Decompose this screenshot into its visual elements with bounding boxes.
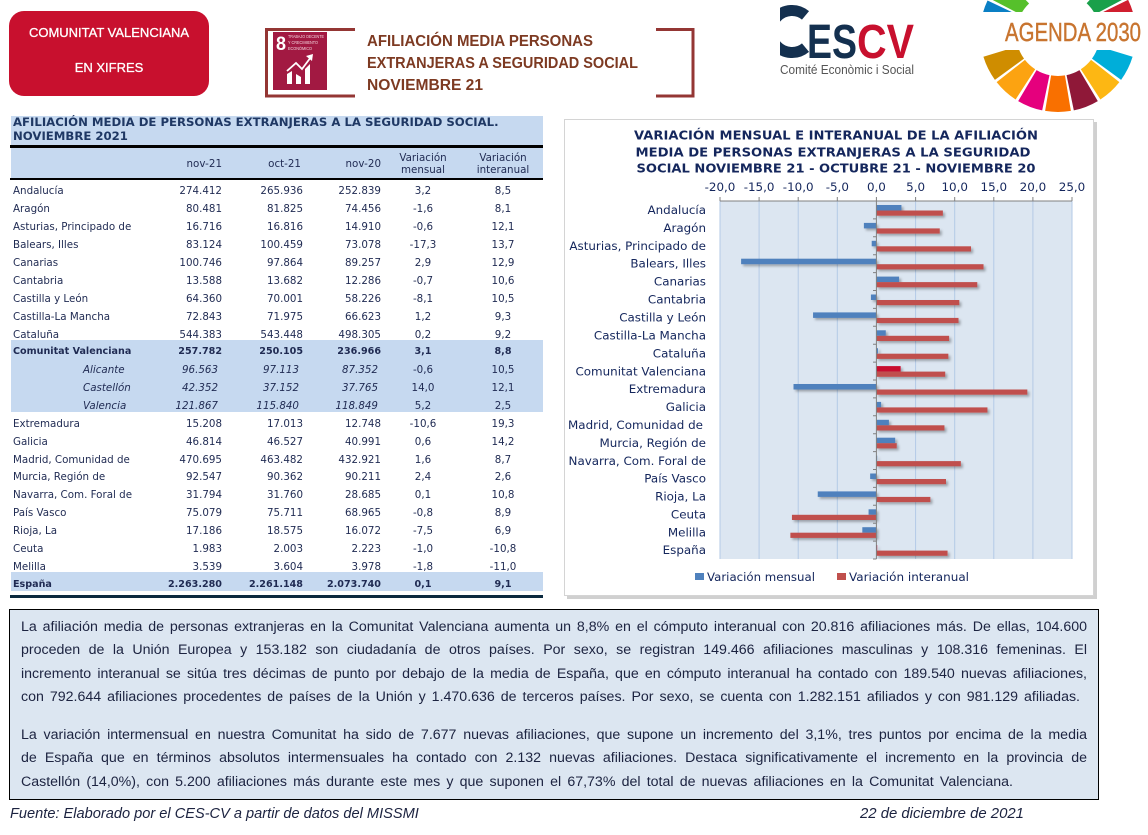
row: Cantabria — [13, 275, 514, 287]
row: Andalucía: 265.936 — [260, 185, 303, 197]
row: Galicia: Galicia — [13, 436, 48, 448]
logo: Agenda 2030 wheel — [983, 0, 1141, 112]
row: Extremadura: 17.013 — [267, 418, 303, 430]
row: Extremadura: Extremadura — [13, 418, 80, 430]
y axis labels: Navarra, Com. Foral de — [569, 454, 706, 468]
paragraph: interannual — [21, 619, 1087, 705]
table title: NOVIEMBRE 2021 — [13, 129, 128, 143]
row: Rioja — [13, 525, 511, 537]
row: Rioja: 6,9 — [495, 525, 511, 537]
row: Rioja: 16.072 — [345, 525, 381, 537]
row: País Vasco — [13, 507, 511, 519]
row: Melilla: -1,8 — [413, 561, 433, 573]
row: Comunitat Valenciana: 236.966 — [337, 346, 381, 357]
badge: Comunitat Valenciana en xifres — [9, 11, 209, 96]
table header row — [187, 152, 529, 176]
row: Comunitat Valenciana: 8,8 — [494, 346, 512, 357]
table header row: nov-21 — [187, 158, 222, 170]
row: Asturias: 16.716 — [186, 221, 222, 233]
row: Balears: 83.124 — [186, 239, 222, 251]
panel: bar chart — [564, 119, 1097, 599]
y axis labels: Aragón — [663, 221, 706, 235]
row: Rioja: 18.575 — [267, 525, 303, 537]
legend: Variación interanual — [849, 570, 969, 584]
row: Melilla: 3.604 — [274, 561, 303, 573]
date: 22 de diciembre de 2021 — [860, 806, 1024, 822]
x axis labels — [705, 180, 1085, 194]
row: Castilla y León: -8,1 — [413, 293, 433, 305]
row: Cantabria: Cantabria — [13, 275, 63, 287]
paragraph: interannual: proceden de la Unión Europea y 153.182 son ciudadanía de otros países. Por sexo, se registran 149.466 afiliaciones masculinas y 108.316 femeninas. El — [21, 642, 1087, 658]
row: Castellón — [83, 382, 514, 394]
row: Navarra: Navarra, Com. Foral de — [13, 489, 132, 501]
y axis labels: Castilla y León — [619, 310, 706, 324]
row: Cataluña: 544.383 — [179, 329, 222, 341]
row: Asturias: -0,6 — [413, 221, 433, 233]
row: Galicia: 46.527 — [267, 436, 303, 448]
row: Extremadura: 19,3 — [492, 418, 514, 430]
row: Castilla y León: 10,5 — [492, 293, 514, 305]
row: Ceuta: 2.223 — [352, 543, 381, 555]
x axis labels: -15,0 — [744, 180, 774, 194]
y axis labels: Ceuta — [671, 508, 706, 522]
row: Murcia: 92.547 — [186, 471, 222, 483]
y axis labels: Galicia — [666, 400, 706, 414]
bracket: right — [656, 30, 693, 96]
paragraph: intermonthly: La variación intermensual en nuestra Comunitat ha sido de 7.677 nuevas afiliaciones, que supone un incremento del 3,1%, tres puntos por encima de la media — [21, 727, 1087, 743]
row: Madrid: 1,6 — [415, 454, 431, 466]
icon: SDG 8 decent work — [273, 32, 327, 90]
row: España: España — [13, 579, 52, 590]
row: Andalucía: 8,5 — [495, 185, 511, 197]
table header row: mensual — [401, 164, 445, 176]
x axis labels: 0,0 — [867, 180, 886, 194]
row: Castilla y León: 64.360 — [186, 293, 222, 305]
row: España: 0,1 — [414, 579, 432, 590]
row: Navarra — [13, 489, 514, 501]
x axis labels: 10,0 — [941, 180, 968, 194]
legend — [695, 570, 969, 584]
row: Aragón: 74.456 — [345, 203, 381, 215]
y axis labels: Cataluña — [653, 346, 706, 360]
y axis labels: Comunitat Valenciana — [575, 364, 706, 378]
row: España: 9,1 — [494, 579, 512, 590]
row: Aragón: -1,6 — [413, 203, 433, 215]
row: País Vasco: -0,8 — [413, 507, 433, 519]
row: Valencia — [83, 400, 511, 412]
table header row: Variación — [479, 152, 527, 164]
row: Cantabria: 13.588 — [186, 275, 222, 287]
icon: SDG 8 decent work: TRABAJO DECENTE — [288, 34, 324, 39]
heading: report title: AFILIACIÓN MEDIA PERSONAS — [367, 32, 593, 50]
row: Balears: 13,7 — [492, 239, 514, 251]
row: Murcia: 90.362 — [267, 471, 303, 483]
row: Murcia: 2,4 — [415, 471, 431, 483]
row: Valencia: Valencia — [83, 400, 126, 412]
row: Castilla-La Mancha: 9,3 — [495, 311, 511, 323]
table header row: interanual — [477, 164, 529, 176]
paragraph: intermonthly: de España que en términos absolutos intermensuales ha contado con 2.132 nuevas afiliaciones. Destaca significativamente el incremento en la provincia de — [21, 750, 1087, 766]
row: Galicia: 0,6 — [415, 436, 431, 448]
badge: Comunitat Valenciana en xifres: EN XIFRES — [75, 60, 143, 75]
x axis labels: -5,0 — [826, 180, 849, 194]
row: Madrid — [13, 454, 511, 466]
y axis labels: Madrid, Comunidad de — [568, 418, 703, 432]
paragraph: interannual: La afiliación media de personas extranjeras en la Comunitat Valenciana aumenta un 8,8% en el cómputo interanual con 20.816 afiliaciones más. De ellas, 104.600 — [21, 619, 1087, 635]
row: Andalucía: 252.839 — [338, 185, 381, 197]
row: Aragón: Aragón — [13, 203, 50, 215]
chart title: MEDIA DE PERSONAS EXTRANJERAS A LA SEGURIDAD — [636, 144, 1030, 160]
plot area — [720, 201, 1072, 559]
y axis labels: Melilla — [668, 526, 706, 540]
row: Alicante: 97.113 — [263, 364, 299, 376]
row: Cantabria: 10,6 — [492, 275, 514, 287]
row: Comunitat Valenciana: Comunitat Valenciana — [13, 346, 131, 357]
row: Murcia: Murcia, Región de — [13, 471, 105, 483]
chart title: VARIACIÓN MENSUAL E INTERANUAL DE LA AFILIACIÓN — [634, 128, 1038, 142]
row: Alicante: 10,5 — [492, 364, 514, 376]
row: País Vasco: 8,9 — [495, 507, 511, 519]
row: País Vasco: 68.965 — [345, 507, 381, 519]
row: Ceuta: -10,8 — [490, 543, 516, 555]
icon: SDG 8 decent work: Y CRECIMIENTO — [288, 40, 319, 45]
row: Balears: 73.078 — [345, 239, 381, 251]
row: Canarias: 12,9 — [492, 257, 514, 269]
row: Cataluña: 0,2 — [415, 329, 431, 341]
row: Andalucía: Andalucía — [13, 185, 64, 197]
x axis labels: 20,0 — [1020, 180, 1046, 194]
row: Ceuta: Ceuta — [13, 543, 43, 555]
row: Castilla-La Mancha: Castilla-La Mancha — [13, 311, 110, 323]
row: Ceuta: 2.003 — [274, 543, 303, 555]
logo: CES-CV — [780, 5, 914, 77]
y axis labels: Balears, Illes — [630, 256, 706, 270]
row: Galicia: 46.814 — [186, 436, 222, 448]
row: Balears: Balears, Illes — [13, 239, 78, 251]
row: Canarias — [13, 257, 514, 269]
row: Extremadura: 12.748 — [345, 418, 381, 430]
row: Murcia: 2,6 — [495, 471, 511, 483]
row: Canarias: Canarias — [13, 257, 58, 269]
row: España — [13, 579, 512, 590]
row: Castilla y León: Castilla y León — [13, 293, 88, 305]
row: Melilla: 3.978 — [352, 561, 381, 573]
row: Melilla: 3.539 — [193, 561, 222, 573]
table header row: Variación — [399, 152, 447, 164]
bracket: left — [266, 30, 355, 96]
icon: SDG 8 decent work: 8 — [276, 34, 286, 55]
row: Navarra: 0,1 — [415, 489, 431, 501]
source note: Fuente: Elaborado por el CES-CV a partir de datos del MISSMI — [10, 806, 419, 822]
series: variación mensual bars — [741, 205, 901, 551]
row: Asturias — [13, 221, 514, 233]
row: Alicante: 96.563 — [182, 364, 218, 376]
row: Castellón: 14,0 — [412, 382, 434, 394]
row: Rioja: 17.186 — [186, 525, 222, 537]
row: Aragón: 8,1 — [495, 203, 511, 215]
row: Castilla y León — [13, 293, 514, 305]
row: País Vasco: 75.079 — [186, 507, 222, 519]
row: Castilla-La Mancha — [13, 311, 511, 323]
row: Canarias: 100.746 — [179, 257, 222, 269]
heading: report title — [367, 32, 638, 94]
table title: AFILIACIÓN MEDIA DE PERSONAS EXTRANJERAS A LA SEGURIDAD SOCIAL. — [13, 115, 499, 129]
panel: data table — [10, 115, 543, 598]
row: Cantabria: 12.286 — [345, 275, 381, 287]
header heading with SDG icon and brackets — [265, 28, 694, 98]
legend: Variación mensual — [707, 570, 815, 584]
row: País Vasco: País Vasco — [13, 507, 66, 519]
row: Madrid: 8,7 — [495, 454, 511, 466]
row: Castilla y León: 70.001 — [267, 293, 303, 305]
x axis labels: 25,0 — [1059, 180, 1085, 194]
row: España: 2.263.280 — [168, 579, 222, 590]
row: Murcia: 90.211 — [345, 471, 381, 483]
row: Valencia: 2,5 — [495, 400, 511, 412]
row: Murcia — [13, 471, 511, 483]
row: Castellón: 37.152 — [263, 382, 299, 394]
logo: CES-CV: ES — [807, 16, 857, 69]
y axis labels: Cantabria — [648, 292, 706, 306]
row: Navarra: 28.685 — [345, 489, 381, 501]
series: variación interanual bars — [790, 210, 1027, 556]
row: Alicante: -0,6 — [413, 364, 433, 376]
row: Andalucía — [13, 185, 511, 197]
row: Rioja: -7,5 — [413, 525, 433, 537]
row: Cataluña: 543.448 — [260, 329, 303, 341]
row: Galicia: 40.991 — [345, 436, 381, 448]
row: Cataluña: 9,2 — [495, 329, 511, 341]
row: Aragón: 81.825 — [267, 203, 303, 215]
row: Castilla y León: 58.226 — [345, 293, 381, 305]
row: España: 2.073.740 — [327, 579, 381, 590]
paragraph: intermonthly: Castellón (14,0%), con 5.200 afiliaciones más durante este mes y que suponen el 67,73% del total de nuevas afiliaciones en la Comunitat Valenciana. — [21, 774, 1013, 790]
row: Alicante: 87.352 — [342, 364, 378, 376]
row: Ceuta: -1,0 — [413, 543, 433, 555]
row: Asturias: Asturias, Principado de — [13, 221, 131, 233]
row: Melilla: -11,0 — [490, 561, 516, 573]
row: Balears: -17,3 — [410, 239, 436, 251]
y axis labels: Asturias, Principado de — [569, 239, 706, 253]
row: Madrid: 470.695 — [179, 454, 222, 466]
vertical zero axis — [873, 201, 876, 559]
row: Balears: 100.459 — [260, 239, 303, 251]
row: Madrid: 432.921 — [338, 454, 381, 466]
x axis labels: 15,0 — [981, 180, 1007, 194]
row: Canarias: 89.257 — [345, 257, 381, 269]
row: Cataluña — [13, 329, 511, 341]
row: Asturias: 16.816 — [267, 221, 303, 233]
row: Balears — [13, 239, 514, 251]
row: Comunitat Valenciana — [13, 346, 512, 357]
row: Castellón: 37.765 — [342, 382, 378, 394]
icon: SDG 8 decent work: ECONÓMICO — [288, 46, 313, 51]
chart title — [634, 128, 1038, 176]
row: Galicia — [13, 436, 514, 448]
y axis labels: España — [663, 543, 706, 557]
row: España: 2.261.148 — [249, 579, 303, 590]
x axis labels: -20,0 — [705, 180, 735, 194]
y axis labels: País Vasco — [644, 472, 706, 486]
table header row: oct-21 — [268, 158, 301, 170]
table title — [13, 115, 499, 143]
paragraph: intermonthly — [21, 727, 1087, 790]
row: Castilla-La Mancha: 71.975 — [267, 311, 303, 323]
chart title: SOCIAL NOVIEMBRE 21 - OCTUBRE 21 - NOVIEMBRE 20 — [636, 160, 1036, 176]
row: Madrid: 463.482 — [260, 454, 303, 466]
row: Castellón: 12,1 — [492, 382, 514, 394]
logo: CES-CV: Comité Econòmic i Social — [780, 63, 914, 77]
row: Navarra: 10,8 — [492, 489, 514, 501]
row: Madrid: Madrid, Comunidad de — [13, 454, 130, 466]
row: Aragón: 80.481 — [186, 203, 222, 215]
row: Valencia: 5,2 — [415, 400, 431, 412]
row: Valencia: 115.840 — [256, 400, 299, 412]
row: Galicia: 14,2 — [492, 436, 514, 448]
row: Castilla-La Mancha: 1,2 — [415, 311, 431, 323]
x axis labels: 5,0 — [906, 180, 925, 194]
row: Cataluña: 498.305 — [338, 329, 381, 341]
row: Extremadura — [13, 418, 514, 430]
row: Canarias: 97.864 — [267, 257, 303, 269]
row: Ceuta: 1.983 — [193, 543, 222, 555]
row: Cantabria: -0,7 — [413, 275, 433, 287]
row: Navarra: 31.794 — [186, 489, 222, 501]
heading: report title: EXTRANJERAS A SEGURIDAD SOCIAL — [367, 55, 638, 72]
row: Canarias: 2,9 — [415, 257, 431, 269]
y axis labels: Murcia, Región de — [600, 436, 706, 450]
paragraph: interannual: incremento interanual se sitúa tres décimas de punto por debajo de la media de España, que en cómputo interanual ha contado con 189.540 nuevas afiliaciones, — [21, 666, 1087, 682]
row: Navarra: 31.760 — [267, 489, 303, 501]
row: Alicante: Alicante — [83, 364, 125, 376]
row: Asturias: 12,1 — [492, 221, 514, 233]
x axis labels: -10,0 — [783, 180, 814, 194]
y axis labels — [568, 203, 706, 557]
y axis labels: Extremadura — [629, 382, 706, 396]
row: Melilla: Melilla — [13, 561, 46, 573]
heading: report title: NOVIEMBRE 21 — [367, 77, 483, 94]
row: Castellón: Castellón — [83, 382, 131, 394]
y axis labels: Rioja, La — [655, 490, 706, 504]
row: Aragón — [13, 203, 511, 215]
table header row: nov-20 — [346, 158, 381, 170]
row: Rioja: Rioja, La — [13, 525, 57, 537]
row: Andalucía: 274.412 — [179, 185, 222, 197]
row: Andalucía: 3,2 — [415, 185, 431, 197]
y axis labels: Canarias — [654, 274, 706, 288]
panel: commentary text — [9, 609, 1099, 800]
row: País Vasco: 75.711 — [267, 507, 303, 519]
row: Extremadura: -10,6 — [410, 418, 436, 430]
row: Alicante — [82, 364, 514, 376]
paragraph: interannual: con 792.644 afiliaciones procedentes de países de la Unión y 1.470.636 de terceros países. Por sexo, se cuenta con 1.282.151 afiliados y con 981.129 afiliadas. — [21, 689, 1080, 705]
row: Cataluña: Cataluña — [13, 329, 59, 341]
row: Asturias: 14.910 — [345, 221, 381, 233]
row: Comunitat Valenciana: 250.105 — [259, 346, 303, 357]
row: Castilla-La Mancha: 66.623 — [345, 311, 381, 323]
row: Valencia: 121.867 — [175, 400, 218, 412]
row: Castilla-La Mancha: 72.843 — [186, 311, 222, 323]
row: Cantabria: 13.682 — [267, 275, 303, 287]
badge: Comunitat Valenciana en xifres: COMUNITAT VALENCIANA — [29, 25, 189, 40]
row: Ceuta — [13, 543, 516, 555]
row: Extremadura: 15.208 — [186, 418, 222, 430]
row: Valencia: 118.849 — [335, 400, 378, 412]
y axis labels: Andalucía — [648, 203, 706, 217]
row: Melilla — [13, 561, 516, 573]
y axis labels: Castilla-La Mancha — [594, 328, 706, 342]
row: Comunitat Valenciana: 257.782 — [178, 346, 222, 357]
row: Castellón: 42.352 — [182, 382, 218, 394]
row: Comunitat Valenciana: 3,1 — [414, 346, 432, 357]
